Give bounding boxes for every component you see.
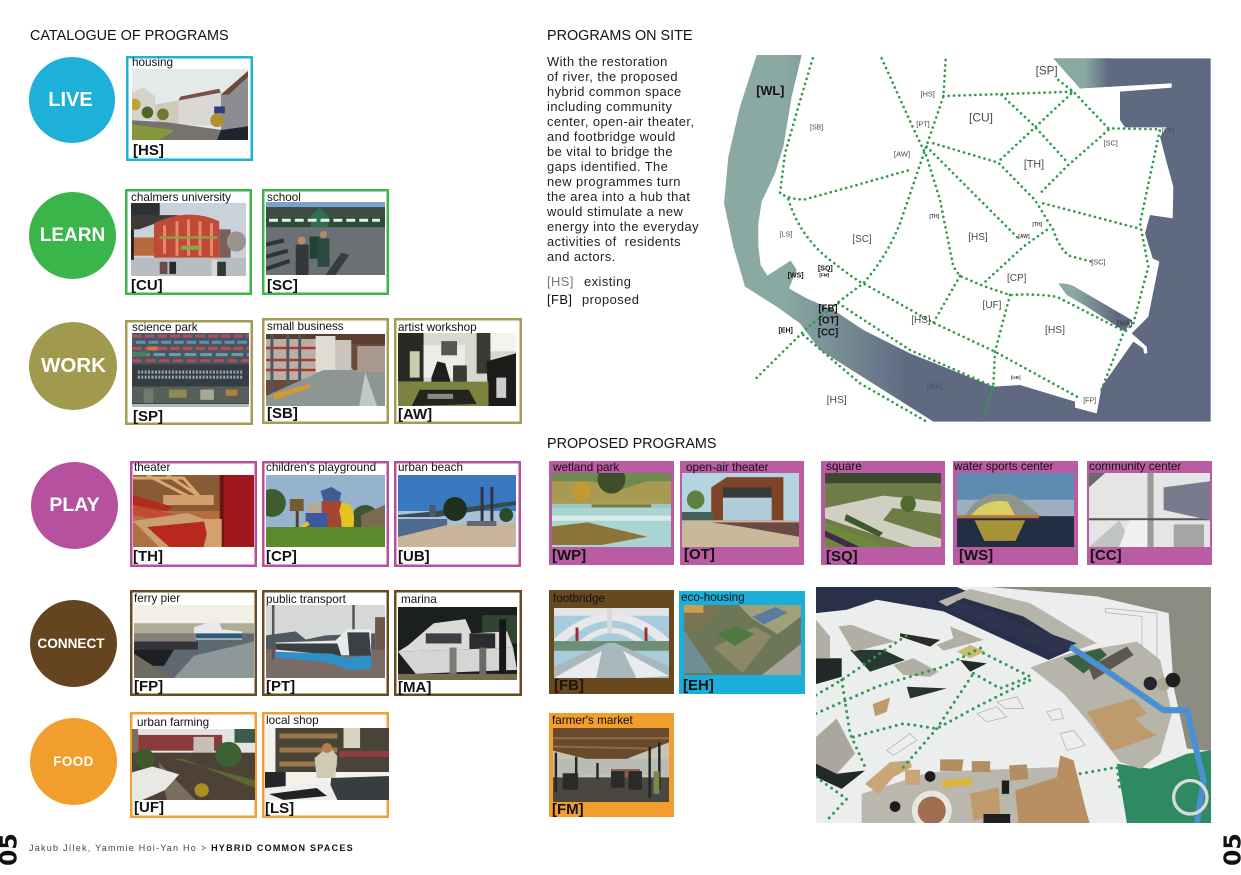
card: marina: marina (401, 593, 437, 606)
card: eco-housing: [EH] (683, 677, 714, 694)
card: marina (394, 590, 522, 696)
map labels: existing programs: [SC] (1091, 257, 1105, 266)
text block: site description: gaps identified. The (547, 159, 668, 174)
card: science park: [SP] (133, 408, 163, 425)
card: farmer's market: farmer's market (552, 714, 633, 727)
card: housing (126, 56, 253, 161)
card: urban beach: urban beach (398, 461, 463, 474)
card: children's playground: [CP] (266, 548, 297, 565)
map labels: existing programs: [CU] (969, 111, 993, 125)
legend: existing and proposed: proposed (582, 292, 639, 307)
card: eco-housing: eco-housing (681, 591, 745, 604)
card: eco-housing (679, 591, 805, 694)
card: marina: [MA] (398, 679, 431, 696)
card: school: [SC] (267, 277, 298, 294)
map labels: proposed programs: [EH] (778, 328, 793, 335)
footer credit: Jakub Jílek, Yammie Hoi-Yan Ho > HYBRID COMMON SPACES (29, 843, 354, 853)
map labels: existing programs: [SC] (1104, 139, 1118, 148)
card: open-air theater: open-air theater (686, 461, 769, 474)
map labels: existing programs: [UB] (1011, 375, 1021, 380)
card: water sports center: water sports center (954, 460, 1053, 473)
card: urban farming: urban farming (137, 716, 209, 729)
map labels: proposed programs: [CC] (818, 328, 838, 339)
card: chalmers university: chalmers university (131, 191, 231, 204)
map labels: existing programs: [MA] (927, 384, 942, 391)
card: school: school (267, 191, 301, 204)
card: wetland park: wetland park (553, 461, 619, 474)
category circle: work: WORK (41, 354, 106, 377)
text block: site description: With the restoration (547, 54, 668, 69)
map labels: proposed programs: [OT] (819, 316, 839, 327)
card: public transport: public transport (266, 593, 346, 606)
legend: existing and proposed: [FB] (547, 292, 572, 307)
card: footbridge: footbridge (553, 592, 605, 605)
map labels: existing programs: [TH] (929, 214, 940, 220)
map labels: existing programs: [TH] (1032, 222, 1043, 228)
card: footbridge (549, 590, 674, 694)
card: artist workshop: artist workshop (398, 321, 477, 334)
card: theater: theater (134, 461, 170, 474)
text block: site description: activities of residents (547, 234, 681, 249)
text block: site description: and actors. (547, 249, 616, 264)
card: wetland park: [WP] (552, 547, 586, 564)
map labels: existing programs: [PT] (916, 120, 930, 129)
map labels: existing programs: [TH] (1024, 158, 1044, 170)
card: farmer's market (549, 713, 674, 817)
category circle: food: FOOD (53, 754, 94, 769)
card: chalmers university: [CU] (131, 277, 163, 294)
map labels: existing programs: [MA] (1117, 321, 1132, 328)
text block: site description: hybrid common space (547, 84, 682, 99)
card: children's playground: children's playground (266, 461, 376, 474)
map labels: existing programs: [HS] (911, 315, 931, 326)
text block: site description: and footbridge would (547, 129, 676, 144)
water (724, 55, 1211, 422)
map labels: existing programs: [HS] (921, 90, 935, 99)
card: local shop (262, 712, 389, 818)
category circle: learn (29, 192, 116, 279)
category circle: play: PLAY (49, 494, 100, 516)
card: urban farming (130, 712, 257, 818)
card: ferry pier: ferry pier (134, 592, 180, 605)
card: local shop: [LS] (265, 800, 294, 817)
map labels: proposed programs: [FB] (818, 304, 838, 315)
card: small business (262, 318, 389, 424)
map labels: existing programs: [SB] (810, 125, 823, 132)
card: ferry pier (130, 590, 257, 696)
card: square: [SQ] (826, 548, 858, 565)
card: children's playground (262, 461, 389, 567)
map labels: existing programs: [UF] (983, 300, 1002, 311)
card: housing: [HS] (133, 142, 164, 159)
heading: proposed programs: PROPOSED PROGRAMS (547, 436, 717, 452)
dotted routes (755, 58, 1160, 422)
text block: site description (547, 54, 699, 264)
card: open-air theater (680, 461, 804, 565)
card: theater (130, 461, 257, 567)
text block: site description: would stimulate a new (547, 204, 683, 219)
category circle: play (31, 462, 118, 549)
card: water sports center (953, 461, 1078, 565)
site map (724, 55, 1211, 422)
card: urban beach (394, 461, 521, 567)
card: square: square (826, 460, 862, 473)
legend: existing and proposed: existing (584, 274, 631, 289)
category circle: connect (30, 600, 117, 687)
category circle: learn: LEARN (40, 224, 105, 246)
map labels: existing programs: [HS] (827, 395, 847, 406)
map labels: existing programs: [HS] (968, 232, 988, 243)
map labels: existing programs: [HS] (1045, 325, 1065, 336)
category circle: live (29, 57, 115, 143)
card: public transport (262, 590, 389, 696)
category circle: connect: CONNECT (37, 636, 105, 651)
card: water sports center: [WS] (959, 547, 993, 564)
map labels: existing programs: [SP] (1036, 65, 1058, 78)
map labels: existing programs: [LS] (780, 232, 792, 239)
legend: existing and proposed: [HS] (547, 274, 574, 289)
card: science park: science park (132, 321, 198, 334)
category circle: live: LIVE (48, 88, 93, 110)
card: chalmers university (125, 189, 252, 295)
card: footbridge: [FB] (554, 677, 584, 694)
card: housing: housing (132, 56, 173, 69)
photo: physical site model (816, 587, 1211, 823)
map labels: existing programs (780, 65, 1175, 406)
text block: site description: energy into the everyday (547, 219, 699, 234)
map labels: existing programs: [FP] (1162, 129, 1175, 136)
card: community center: [CC] (1090, 547, 1122, 564)
text block: site description: including community (547, 99, 672, 114)
card: small business: small business (267, 320, 344, 333)
card: school (262, 189, 389, 295)
map labels: proposed programs: [SQ] (818, 266, 833, 273)
map labels: proposed programs: [WL] (756, 84, 784, 98)
map labels: existing programs: [SC] (852, 234, 872, 245)
category circle: food (30, 718, 117, 805)
map labels: existing programs: [CP] (1007, 273, 1027, 284)
card: artist workshop: [AW] (398, 406, 432, 423)
card: science park (125, 320, 253, 425)
card: wetland park (549, 461, 674, 565)
text block: site description: center, open-air theater, (547, 114, 694, 129)
card: square (821, 461, 945, 565)
map labels: proposed programs: [WS] (788, 273, 804, 280)
card: community center: community center (1089, 460, 1181, 473)
map labels: existing programs: [FP] (1083, 398, 1096, 405)
inlet (1058, 283, 1132, 332)
map labels: existing programs: [AW] (894, 150, 910, 159)
map labels: existing programs: [AW] (1018, 234, 1030, 240)
card: urban farming: [UF] (134, 799, 164, 816)
map labels: proposed programs (756, 84, 839, 339)
card: artist workshop (394, 318, 522, 424)
card: urban beach: [UB] (398, 548, 430, 565)
card: theater: [TH] (133, 548, 163, 565)
text block: site description: of river, the proposed (547, 69, 678, 84)
card: small business: [SB] (267, 405, 298, 422)
heading: programs on site: PROGRAMS ON SITE (547, 28, 693, 44)
card: ferry pier: [FP] (134, 678, 163, 695)
map labels: proposed programs: [FM] (819, 273, 830, 278)
heading: catalogue of programs: CATALOGUE OF PROGRAMS (30, 28, 229, 44)
card: local shop: local shop (266, 714, 319, 727)
card: open-air theater: [OT] (684, 546, 715, 563)
card: community center (1087, 461, 1212, 565)
text block: site description: new programmes turn (547, 174, 681, 189)
category circle: work (29, 322, 117, 410)
legend: existing and proposed (547, 274, 639, 307)
card: farmer's market: [FM] (552, 801, 584, 818)
text block: site description: be vital to bridge the (547, 144, 673, 159)
text block: site description: the area into a hub that (547, 189, 690, 204)
card: public transport: [PT] (266, 678, 295, 695)
